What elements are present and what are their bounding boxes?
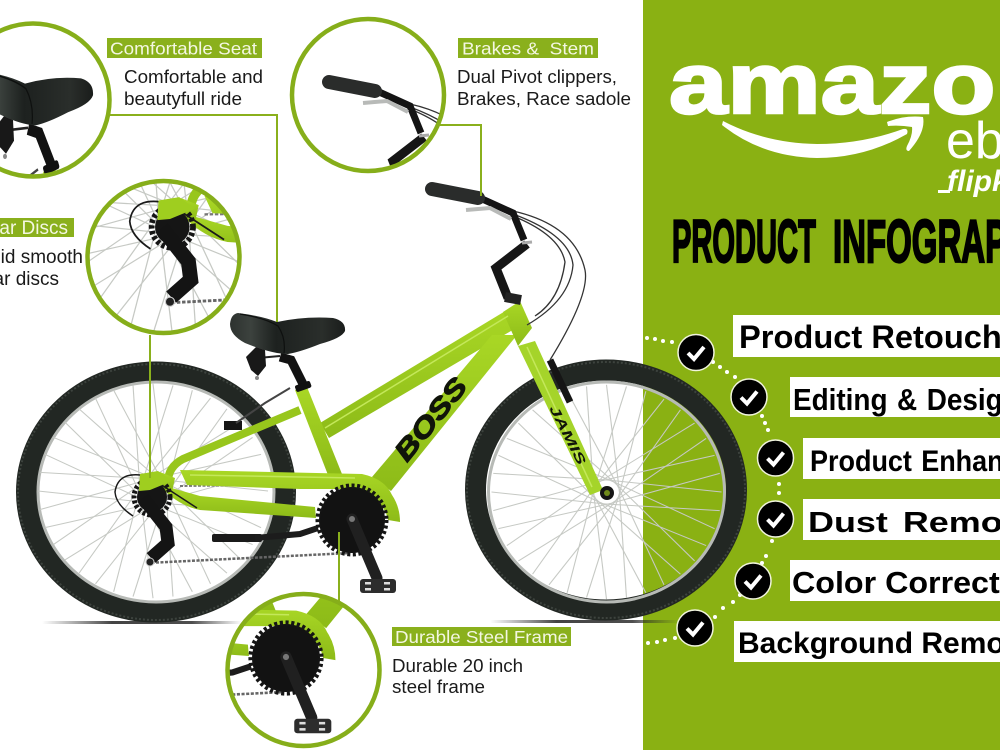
callout: comfortable seat [107,38,263,109]
handlebar cables [513,211,586,360]
icon: check 3 [758,440,794,476]
list item: color correction [735,560,1000,601]
seat [230,313,345,354]
bicycle illustration [18,189,745,620]
heading: product infographic: PRODUCT [672,207,816,275]
dotted connector [645,336,781,645]
callout: brakes and stem: Brakes, Race sadole [457,89,631,109]
rear cassette and derailleur [115,471,197,566]
callout circle: brakes and stem [290,16,446,174]
callout circle: gear discs [85,178,242,336]
icon: check 5 [735,563,771,599]
list item: product retouching [678,315,1000,370]
fork decal: JAMIS: JAMIS [546,403,589,468]
callout circle: crank and frame [225,592,382,748]
callout: brakes and stem: Dual Pivot clippers, [457,67,617,87]
icon: amazon smile arrow [722,117,923,158]
callout circle: seat [0,21,112,179]
list item: dust removal [758,499,1000,540]
callout: gear discs [0,218,83,290]
icon: check 6 [677,610,713,646]
handlebar, stem and grip [432,189,532,300]
heading: product infographic [672,207,1000,276]
rear wheel [18,364,294,620]
callout: durable steel frame [392,627,571,697]
frame highlights [190,316,592,487]
callout: comfortable seat: beautyfull ride [124,89,242,109]
leader lines [110,115,481,601]
chain and rear crank [147,485,350,563]
front wheel [467,362,745,618]
frame tubes [140,301,603,522]
rear brake [224,388,290,430]
icon: check 1 [678,334,714,370]
chainring and crank [318,486,396,593]
callout: durable steel frame: steel frame [392,677,485,697]
icon: check 4 [758,501,794,537]
callout: comfortable seat: Comfortable and [124,67,263,87]
panel: green sidebar [643,0,1000,750]
frame decal: BOSS: BOSS [388,372,473,467]
callout: durable steel frame: Durable Steel Frame [395,627,568,647]
callout: brakes and stem: Brakes & Stem [462,38,594,58]
callout: comfortable seat: Comfortable Seat [110,38,257,58]
front brake and hub [550,360,614,500]
list item: product enhancement [758,438,1000,479]
list item: editing and design [731,377,1000,417]
callout: durable steel frame: Durable 20 inch [392,656,523,676]
ground shadows under the wheels [42,620,680,624]
list item: background removal [677,610,1000,662]
seat post and suspension [246,347,312,392]
icon: check 2 [731,379,767,415]
callout: brakes and stem [457,38,631,109]
